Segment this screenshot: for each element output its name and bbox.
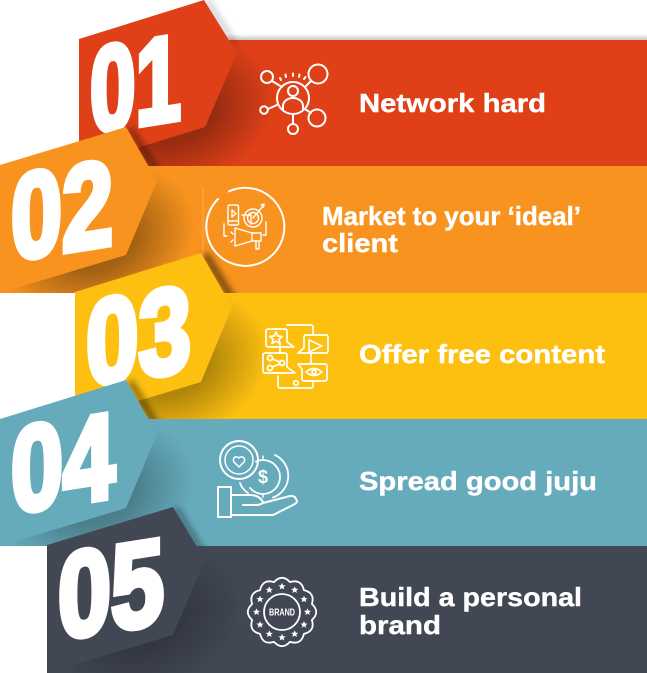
badge: 02: 02 <box>11 135 113 286</box>
panel: step 05 build a personal brand <box>47 507 647 673</box>
badge: 03: 03 <box>86 260 191 412</box>
panel: step 04 spread good juju <box>0 380 647 546</box>
label: build a personal: Build a personal <box>359 582 582 612</box>
label: client: client <box>322 228 398 258</box>
icon: network person <box>260 64 328 134</box>
icon: hand with coins <box>218 441 297 517</box>
icon: content bubbles <box>263 325 328 388</box>
label: market to your ideal client: Market to your ‘ideal’ <box>322 201 581 231</box>
icon: marketing target and megaphone <box>203 188 284 273</box>
label: network hard: Network hard <box>359 88 546 118</box>
badge: 04: 04 <box>11 387 115 539</box>
label: spread good juju: Spread good juju <box>359 466 597 496</box>
panel: step 01 network hard <box>79 0 647 166</box>
badge: 05: 05 <box>58 513 164 665</box>
icon: brand seal <box>248 578 316 646</box>
label: brand: brand <box>359 610 441 640</box>
label: offer free content: Offer free content <box>359 339 605 369</box>
icon: brand seal: BRAND <box>269 608 295 618</box>
dollar sign: $ <box>258 467 268 487</box>
panel: step 03 offer free content <box>75 253 647 420</box>
badge: 01: 01 <box>90 9 181 159</box>
panel: step 02 market to ideal client <box>0 127 647 293</box>
